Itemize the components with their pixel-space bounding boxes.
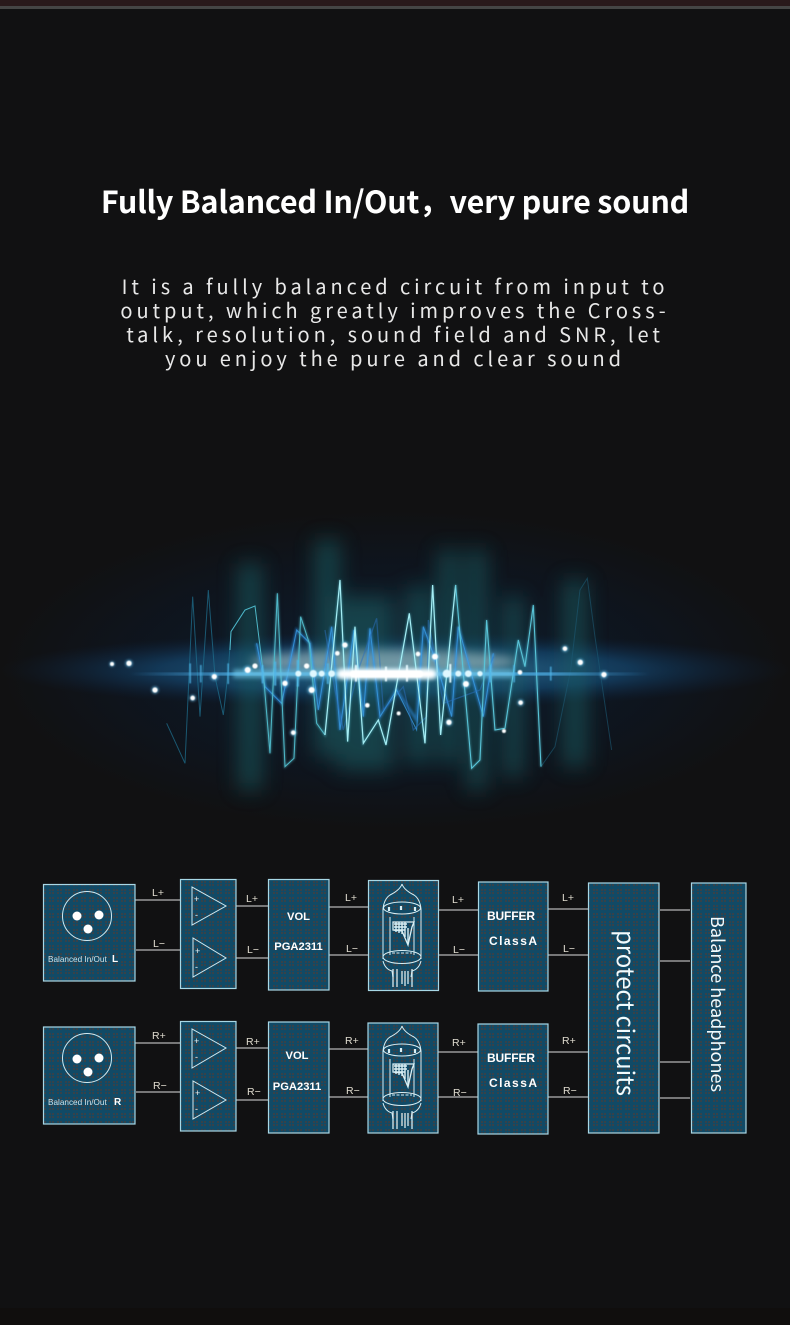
block: amplifiers R: - <box>195 1104 198 1114</box>
block: VOL PGA2311 L: PGA2311 <box>274 941 323 953</box>
description text: you enjoy the pure and clear sound <box>165 343 625 372</box>
signal labels: L− <box>453 944 465 956</box>
signal labels: R− <box>346 1085 360 1097</box>
block: amplifiers L: - <box>195 962 198 972</box>
block: protect circuits <box>588 883 659 1133</box>
description text: talk, resolution, sound field and SNR, let <box>126 319 664 348</box>
signal labels: L+ <box>152 887 164 899</box>
signal labels: L+ <box>246 893 258 905</box>
signal labels: L+ <box>452 894 464 906</box>
description text: It is a fully balanced circuit from input to <box>122 271 668 300</box>
block: buffer class A R: BUFFER <box>487 1051 535 1065</box>
signal labels: L− <box>346 943 358 955</box>
block: protect circuits: protect circuits <box>610 930 645 1096</box>
block: buffer class A L: ClassA <box>489 934 537 948</box>
circuit diagram <box>44 880 746 1134</box>
block: amplifiers R: - <box>195 1052 198 1062</box>
signal labels: R+ <box>345 1035 359 1047</box>
block: VOL PGA2311 L: VOL <box>287 911 310 923</box>
block: VOL PGA2311 R <box>268 1022 329 1133</box>
block: amplifiers L: - <box>195 910 198 920</box>
block: balance headphones <box>692 883 746 1133</box>
sound waveform graphic <box>0 510 790 830</box>
block: amplifiers R: + <box>195 1088 200 1098</box>
signal labels: R+ <box>562 1035 576 1047</box>
block: buffer class A R <box>478 1024 548 1134</box>
signal labels: L− <box>153 938 165 950</box>
block: vacuum tube R <box>368 1023 438 1133</box>
signal labels: R− <box>247 1086 261 1098</box>
description text: output, which greatly improves the Cross- <box>120 295 670 324</box>
block: amplifiers R: + <box>194 1036 199 1046</box>
block: buffer class A R: ClassA <box>489 1076 537 1090</box>
signal labels: L+ <box>562 892 574 904</box>
signal labels: R+ <box>452 1037 466 1049</box>
block: buffer class A L <box>478 882 548 991</box>
block: amplifiers R <box>180 1022 236 1131</box>
block: balance headphones: Balance headphones <box>705 916 731 1092</box>
description text <box>120 271 670 372</box>
signal labels: L− <box>247 944 259 956</box>
signal labels <box>152 887 577 1099</box>
block: balanced input R: Balanced In/Out <box>48 1098 107 1107</box>
block: VOL PGA2311 L <box>268 880 329 990</box>
signal labels: R+ <box>246 1036 260 1048</box>
block: vacuum tube L <box>368 880 438 990</box>
block: amplifiers L: + <box>194 894 199 904</box>
signal labels: R− <box>453 1087 467 1099</box>
block: buffer class A L: BUFFER <box>487 909 535 923</box>
block: VOL PGA2311 R: PGA2311 <box>273 1081 321 1093</box>
title: Fully Balanced In/Out，very pure sound <box>101 178 689 222</box>
block: amplifiers L <box>180 880 236 988</box>
block: balanced input L: L <box>112 954 118 965</box>
signal labels: R− <box>563 1085 577 1097</box>
block: amplifiers L: + <box>195 946 200 956</box>
wires <box>135 900 690 1100</box>
block: balanced input L: Balanced In/Out <box>48 955 107 964</box>
signal labels: R− <box>153 1080 167 1092</box>
signal labels: L− <box>563 943 575 955</box>
signal labels: L+ <box>345 892 357 904</box>
block: balanced input R <box>44 1027 135 1124</box>
signal labels: R+ <box>152 1030 166 1042</box>
block: balanced input L <box>44 884 135 981</box>
block: balanced input R: R <box>114 1097 122 1108</box>
block: VOL PGA2311 R: VOL <box>286 1050 309 1062</box>
